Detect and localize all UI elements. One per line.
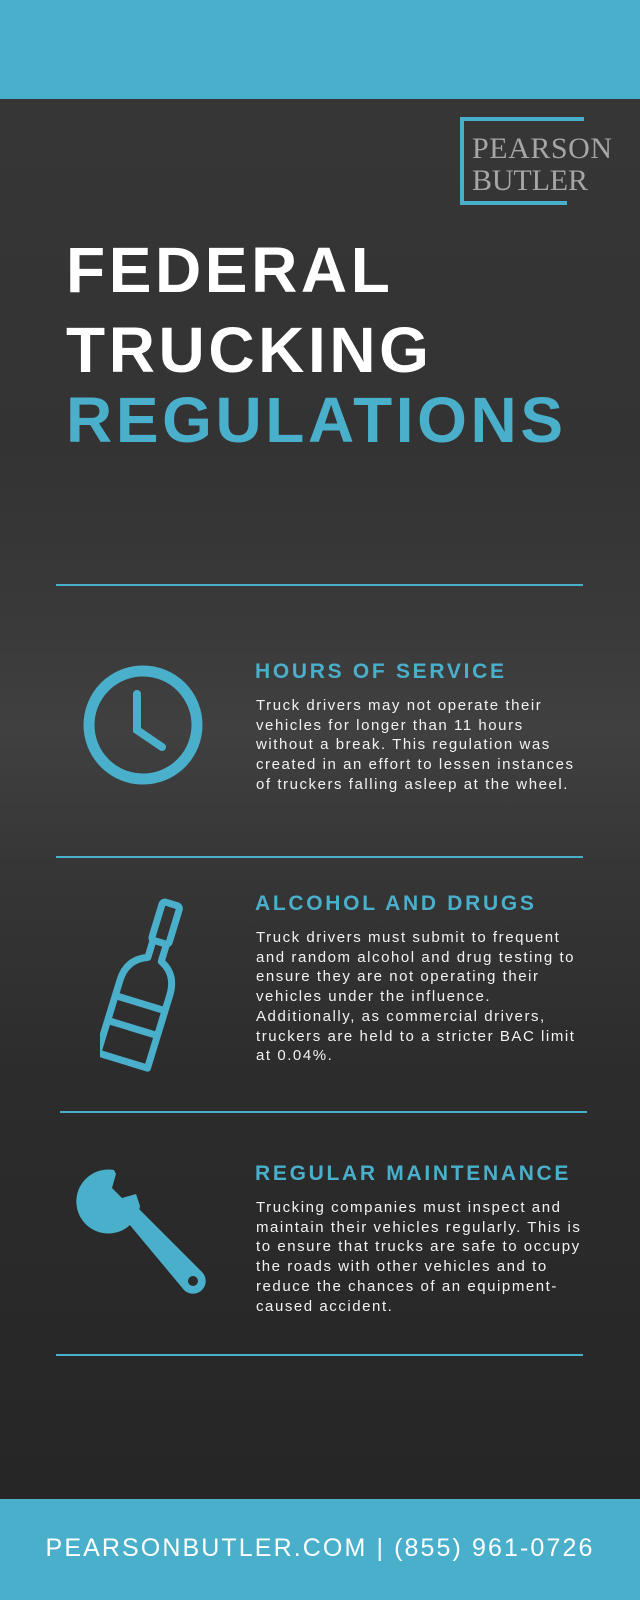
section: alcohol: truckers are held to a stricter BAC limit [256,1028,575,1045]
section: hours of service [255,660,575,793]
section: hours of service: without a break. This regulation was [256,736,551,753]
section: alcohol: at 0.04%. [256,1047,333,1064]
section: alcohol [255,892,575,1064]
logo: BUTLER [472,164,588,197]
title: TRUCKING [66,314,433,386]
section: maintenance: REGULAR MAINTENANCE [255,1162,571,1185]
footer text: PEARSONBUTLER.COM | (855) 961-0726 [46,1534,594,1562]
section: maintenance: maintain their vehicles regularly. This is [256,1219,581,1236]
icon: clock [84,666,202,784]
section: maintenance: to ensure that trucks are safe to occupy [256,1238,581,1255]
section: hours of service: created in an effort to lessen instances [256,756,575,773]
section: alcohol: ALCOHOL AND DRUGS [255,892,537,915]
icon: bottle [100,898,183,1072]
section: maintenance: Trucking companies must inspect and [256,1199,561,1216]
section: hours of service: Truck drivers may not operate their [256,697,542,714]
title: FEDERAL [66,234,393,306]
section: hours of service: vehicles for longer than 11 hours [256,717,524,734]
section: maintenance [255,1162,581,1315]
icon: wrench [76,1170,206,1294]
section: alcohol: Additionally, as commercial drivers, [256,1008,546,1025]
title: REGULATIONS [66,384,567,456]
logo [460,117,612,205]
section: maintenance: caused accident. [256,1298,393,1315]
logo: PEARSON [472,132,612,165]
section: alcohol: Truck drivers must submit to frequent [256,929,560,946]
section: maintenance: reduce the chances of an equipment- [256,1278,558,1295]
section: alcohol: and random alcohol and drug testing to [256,949,575,966]
section: hours of service: of truckers falling asleep at the wheel. [256,776,569,793]
section: maintenance: the roads with other vehicles and to [256,1258,548,1275]
top bar [0,0,640,99]
section: alcohol: vehicles under the influence. [256,988,491,1005]
section: alcohol: ensure they are not operating their [256,968,540,985]
footer bar [0,1499,640,1600]
title [66,234,567,456]
section: hours of service: HOURS OF SERVICE [255,660,507,683]
